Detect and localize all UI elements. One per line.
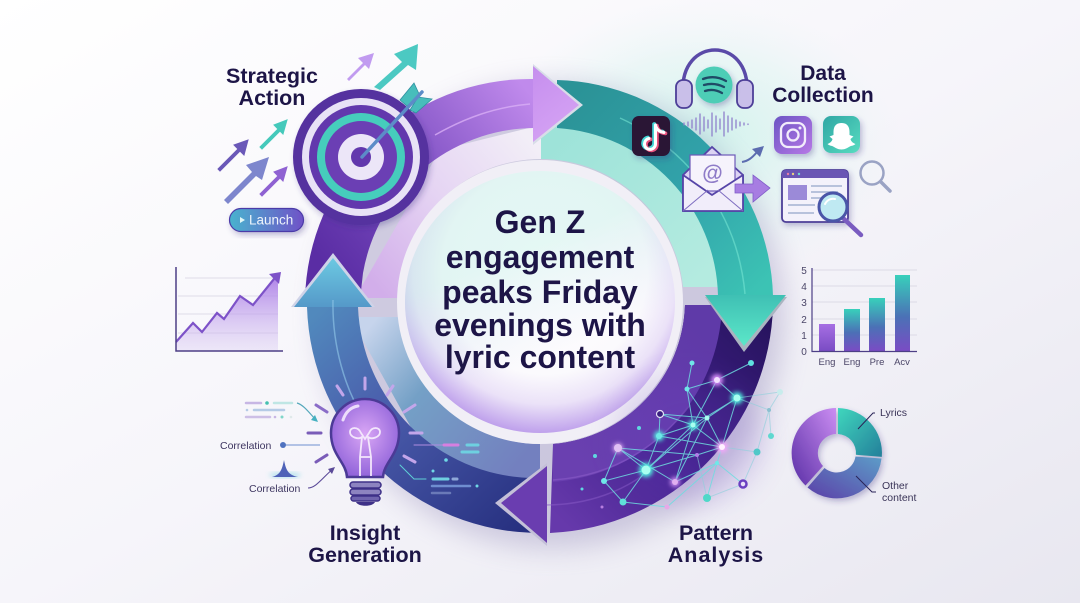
label: correlation 1 — [220, 440, 320, 452]
arrow: envelope to browser — [735, 175, 770, 202]
axis labels: 1 — [801, 331, 807, 342]
headband — [683, 50, 747, 92]
data dashes left of bulb — [246, 401, 318, 422]
label: correlation 1: Correlation — [220, 440, 272, 452]
purple band highlight — [435, 104, 530, 135]
network nodes — [580, 360, 783, 510]
mint glow behind data collection — [500, 0, 900, 280]
heading: Insight Generation: Insight — [330, 521, 400, 545]
heading: Insight Generation: Generation — [308, 543, 422, 567]
icon: instagram — [774, 116, 812, 154]
spotify disc — [696, 66, 732, 104]
lyrics leader and label: Lyrics — [880, 407, 907, 419]
icon: browser window with magnifier — [782, 170, 861, 235]
target arrow shaft — [362, 92, 422, 157]
purple segment band — [305, 79, 533, 300]
center headline: lyric content — [445, 339, 635, 375]
ring shadow — [320, 84, 784, 548]
network node glows — [613, 374, 743, 487]
dark purple arrowhead — [495, 463, 547, 546]
center headline: engagement — [446, 239, 635, 275]
arrow: teal — [260, 120, 287, 149]
bulb rays — [308, 378, 422, 462]
heading: Data Collection: Data — [800, 62, 846, 85]
axis labels: Eng — [819, 357, 835, 368]
center headline: evenings with — [434, 307, 646, 343]
ear cups — [676, 80, 692, 108]
bar chart — [801, 266, 917, 368]
axis labels: Acv — [894, 357, 910, 368]
arrow: blue fading — [224, 157, 269, 204]
icon: snapchat — [823, 116, 860, 153]
network edges — [604, 363, 780, 507]
blue segment band — [307, 307, 540, 533]
teal arrowhead — [705, 295, 787, 352]
icon: tiktok — [632, 116, 670, 156]
inner band: blue sector — [350, 317, 540, 495]
arrow: curved up — [742, 146, 764, 162]
axis labels: 0 — [801, 347, 807, 358]
icon: sound waveform — [684, 112, 748, 136]
arrows rising — [218, 44, 418, 204]
inner band: mint sector — [541, 125, 722, 287]
axis labels: 4 — [801, 282, 807, 293]
data dashes right of bulb — [400, 445, 478, 493]
heading: Strategic Action: Action — [239, 86, 305, 110]
icon: peak glyph — [269, 460, 301, 478]
at sign: @ — [702, 162, 723, 185]
icon: loose magnifier — [860, 162, 890, 191]
bars — [819, 324, 835, 351]
arrow: teal top — [374, 44, 418, 90]
label: correlation 2 — [249, 467, 335, 495]
icon: light bulb — [308, 378, 422, 506]
purple slice — [792, 408, 836, 486]
axis labels: Eng — [844, 357, 860, 368]
dark purple segment band — [550, 305, 773, 533]
launch button — [230, 208, 304, 232]
cycle ring — [291, 64, 787, 548]
other content leader and label: content — [882, 492, 917, 504]
icon: target with arrow — [293, 83, 432, 225]
target arrow fletching — [400, 83, 432, 113]
arrow to bulb — [297, 403, 317, 421]
icon: envelope — [683, 147, 743, 211]
other content slice — [808, 456, 882, 498]
axis labels: 3 — [801, 298, 807, 309]
other content leader and label: Other — [882, 480, 909, 492]
network graph — [580, 360, 783, 510]
axis labels: 5 — [801, 266, 807, 277]
heading: Strategic Action: Strategic — [226, 64, 318, 88]
heading: Pattern Analysis: Pattern — [679, 521, 753, 545]
lyrics slice — [838, 408, 882, 457]
axis labels — [801, 266, 910, 368]
arrow: purple — [218, 140, 248, 171]
inner band: lavender sector — [355, 125, 541, 298]
network glow — [615, 375, 765, 505]
letter — [690, 155, 735, 191]
bulb filament — [350, 428, 380, 476]
teal segment band — [557, 80, 773, 296]
purple arrowhead — [533, 64, 583, 145]
arrow: violet — [260, 167, 287, 196]
center headline: Gen Z — [495, 204, 585, 240]
magnifier — [844, 219, 861, 235]
other content leader and label — [856, 476, 917, 504]
bulb base — [350, 482, 381, 506]
donut chart — [792, 407, 917, 504]
teal band highlight — [620, 118, 745, 294]
axis labels: Pre — [870, 357, 884, 368]
bottom band highlight — [553, 405, 690, 480]
heading: Data Collection: Collection — [772, 84, 874, 107]
icon: headphones with spotify — [676, 50, 753, 108]
center circle — [397, 160, 683, 444]
arrow: lavender top — [347, 53, 374, 81]
label: correlation 2: Correlation — [249, 483, 301, 495]
blue arrowhead — [291, 253, 375, 307]
blue band highlight — [333, 300, 365, 420]
line chart — [176, 267, 283, 351]
axis labels: 2 — [801, 315, 807, 326]
bulb glass — [331, 399, 399, 477]
heading: Pattern Analysis: Analysis — [668, 543, 764, 567]
launch button: Launch — [249, 212, 293, 228]
center headline: peaks Friday — [442, 274, 638, 310]
